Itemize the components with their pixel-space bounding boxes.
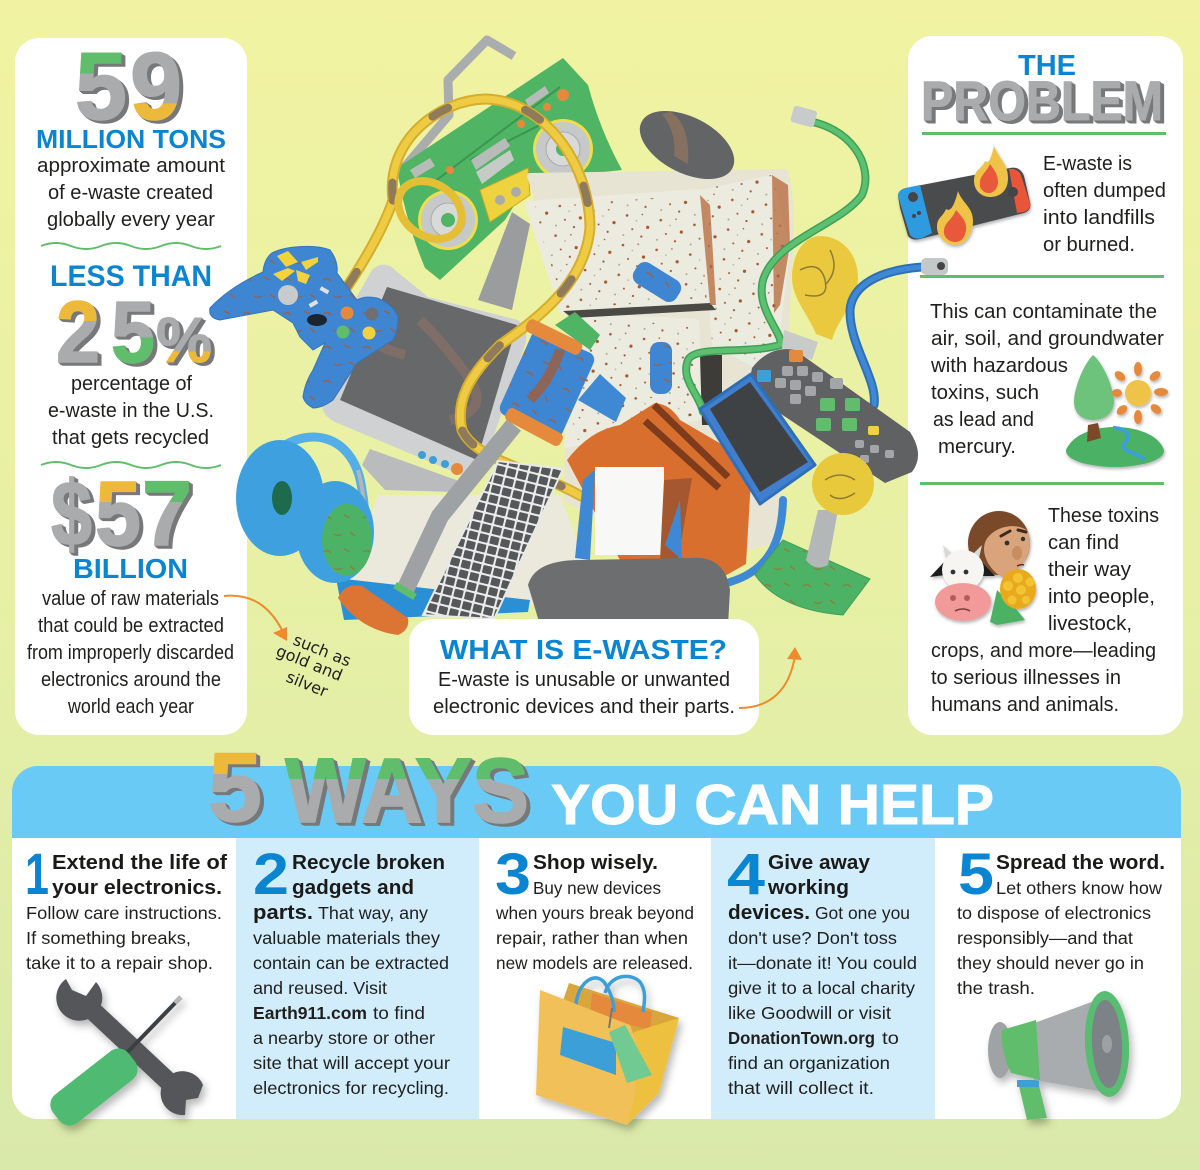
heading: problem: PROBLEM: [921, 69, 1163, 132]
illustration: pile of e-waste: [210, 40, 948, 635]
step 4: give it to a local charity: [728, 978, 915, 998]
icon: shopping bag: [536, 976, 679, 1125]
step 4: like Goodwill or visit: [728, 1003, 891, 1023]
step 2: to find: [373, 1003, 425, 1023]
step 5: Let others know how: [996, 878, 1162, 898]
game controller: [210, 246, 398, 408]
step 4: DonationTown.org: [728, 1028, 875, 1048]
step 3: Shop wisely.: [533, 852, 658, 874]
step 5: [957, 842, 1165, 1120]
big number: $57: 7: [142, 463, 192, 565]
green cable: [686, 120, 865, 412]
heading: billion: BILLION: [73, 553, 188, 584]
icon: burning game console: [898, 146, 1030, 245]
text: definition: E-waste is unusable or unwanted: [438, 669, 730, 691]
keyboard: [423, 461, 563, 619]
step 2: contain can be extracted: [253, 953, 449, 973]
text: contaminate: [930, 301, 1164, 458]
handwritten note: such as gold and silver: such as: [291, 630, 354, 670]
step 2: electronics for recycling.: [253, 1078, 449, 1098]
step 5: to dispose of electronics: [957, 903, 1151, 923]
big number: 59: 5: [75, 33, 127, 140]
text: raw materials value: that could be extracted: [38, 615, 224, 637]
text: recycled share: that gets recycled: [52, 427, 209, 449]
text: e-waste amount: of e-waste created: [48, 182, 213, 204]
step 3: new models are released.: [496, 953, 693, 973]
yellow cable: [347, 99, 590, 496]
step 4: devices.: [728, 902, 810, 924]
gray bracket: [402, 40, 514, 170]
fridge base: [345, 495, 600, 615]
arrow: to pile: [739, 647, 802, 708]
step 2: [253, 842, 450, 1098]
text: toxins spread: can find: [1048, 532, 1119, 554]
phone: [700, 374, 815, 504]
text: raw materials value: world each year: [67, 696, 194, 718]
text: dumped: often dumped: [1043, 180, 1166, 202]
big number: 25%: [56, 284, 212, 381]
text: contaminate: toxins, such: [931, 382, 1039, 404]
big number: 25%: 5: [111, 284, 155, 381]
text: dumped: E-waste is: [1043, 153, 1132, 175]
step 4: don't use? Don't toss: [728, 928, 897, 948]
step 3: when yours break beyond: [495, 903, 694, 923]
step 5: responsibly—and that: [957, 928, 1133, 948]
step 2: site that will accept your: [253, 1053, 450, 1073]
step 4: Give away: [768, 852, 871, 874]
text: e-waste amount: approximate amount: [37, 155, 225, 177]
step 4: it—donate it! You could: [728, 953, 917, 973]
text: dumped: into landfills: [1043, 207, 1155, 229]
arrow: raw materials note: [224, 596, 287, 641]
step 1: Extend the life of: [52, 852, 227, 874]
big number: 25%: %: [156, 304, 212, 376]
step 3: Buy new devices: [533, 878, 661, 898]
step 1: 1: [25, 842, 49, 907]
text: contaminate: This can contaminate the: [930, 301, 1157, 323]
step 1: Follow care instructions.: [26, 903, 222, 923]
step 3: [495, 842, 694, 1125]
step 2: valuable materials they: [253, 928, 440, 948]
step 4: to: [882, 1028, 899, 1048]
panel: key statistics: [15, 33, 247, 735]
big number: $57: [51, 463, 192, 565]
step 4: Got one you: [815, 903, 910, 923]
step 3: 3: [495, 842, 531, 907]
icon: tree, sun and hill: [1066, 355, 1168, 467]
text: dumped: or burned.: [1043, 234, 1135, 256]
text: recycled share: percentage of: [71, 373, 192, 395]
text: toxins spread: crops, and more—leading: [931, 640, 1156, 662]
text: definition: electronic devices and their parts.: [433, 696, 735, 718]
step 2: Earth911.com: [253, 1003, 367, 1023]
handwritten note: such as gold and silver: [274, 630, 354, 701]
toaster: [567, 403, 752, 590]
text: toxins spread: their way: [1048, 559, 1131, 581]
handwritten note: such as gold and silver: silver: [284, 667, 331, 701]
step 2: a nearby store or other: [253, 1028, 435, 1048]
heading: 5 ways: WAYS: [285, 740, 529, 842]
step 2: and reused. Visit: [253, 978, 387, 998]
text: definition: [433, 669, 735, 718]
step 2: Recycle broken: [292, 852, 445, 874]
step 4: 4: [727, 842, 765, 907]
step 2: That way, any: [318, 903, 428, 923]
boombox: [397, 58, 622, 280]
heading: less than: LESS THAN: [50, 260, 212, 293]
step 2: parts.: [253, 902, 313, 924]
text: contaminate: mercury.: [938, 436, 1016, 458]
text: toxins spread: into people,: [1048, 586, 1155, 608]
icon: person, cow and corn: [930, 511, 1036, 625]
headphones: [236, 437, 374, 583]
text: raw materials value: [27, 588, 234, 718]
panel: 5 ways you can help: [12, 732, 1181, 1131]
big number: 59: [75, 33, 182, 140]
heading: the: THE: [1018, 50, 1076, 82]
text: toxins spread: [931, 505, 1159, 716]
text: contaminate: with hazardous: [930, 355, 1068, 377]
step 1: take it to a repair shop.: [26, 953, 213, 973]
step 5: the trash.: [957, 978, 1035, 998]
step 3: repair, rather than when: [496, 928, 688, 948]
fridge: [528, 172, 790, 560]
text: contaminate: as lead and: [933, 409, 1034, 431]
text: toxins spread: to serious illnesses in: [931, 667, 1121, 689]
text: raw materials value: from improperly discarded: [27, 642, 234, 664]
text: recycled share: e-waste in the U.S.: [48, 400, 214, 422]
step 5: Spread the word.: [996, 852, 1165, 874]
heading: what is e-waste: WHAT IS E-WASTE?: [440, 634, 727, 665]
computer mouse: [629, 97, 745, 193]
text: e-waste amount: globally every year: [47, 209, 215, 231]
remote control: [751, 349, 918, 483]
heading: 5 ways: [208, 732, 529, 842]
step 4: working: [767, 877, 849, 899]
cable plugs: [790, 105, 948, 275]
step 4: find an organization: [728, 1053, 890, 1073]
heading: you can help: YOU CAN HELP: [551, 773, 994, 837]
big number: 25%: 2: [56, 284, 100, 381]
step 1: [25, 842, 227, 1131]
text: recycled share: [48, 373, 214, 449]
monitor: [322, 265, 526, 492]
heading: 5 ways: 5: [208, 732, 262, 842]
text: raw materials value: electronics around the: [41, 669, 221, 691]
big number: $57: $: [51, 463, 92, 565]
step 5: they should never go in: [957, 953, 1144, 973]
panel: what is e-waste: [409, 619, 759, 735]
text: contaminate: air, soil, and groundwater: [931, 328, 1164, 350]
big number: 59: 9: [130, 33, 182, 140]
step 4: that will collect it.: [728, 1078, 874, 1098]
big number: $57: 5: [95, 463, 141, 565]
icon: megaphone: [988, 990, 1132, 1120]
text: toxins spread: livestock,: [1048, 613, 1132, 635]
text: toxins spread: humans and animals.: [931, 694, 1119, 716]
step 4: [727, 842, 917, 1098]
joystick: [755, 453, 874, 615]
text: raw materials value: value of raw materials: [42, 588, 219, 610]
step 1: If something breaks,: [26, 928, 191, 948]
text: dumped: [1043, 153, 1166, 256]
icon: wrench and screwdriver: [45, 979, 203, 1131]
heading: million tons: MILLION TONS: [36, 124, 226, 154]
step 2: gadgets and: [292, 877, 414, 899]
monitor arm: [478, 212, 530, 310]
blue cable: [730, 267, 922, 582]
flashlight capsule: [497, 312, 626, 448]
light bulb: [782, 236, 858, 360]
gray printer: [528, 558, 730, 625]
wand vacuum: [338, 425, 514, 635]
step 5: 5: [958, 842, 994, 907]
panel: the problem: [898, 36, 1183, 735]
text: toxins spread: These toxins: [1048, 505, 1159, 527]
text: e-waste amount: [37, 155, 225, 231]
step 1: your electronics.: [52, 877, 222, 899]
blue base: [336, 578, 530, 620]
step 2: 2: [253, 842, 289, 907]
handwritten note: such as gold and silver: gold and: [274, 641, 345, 685]
